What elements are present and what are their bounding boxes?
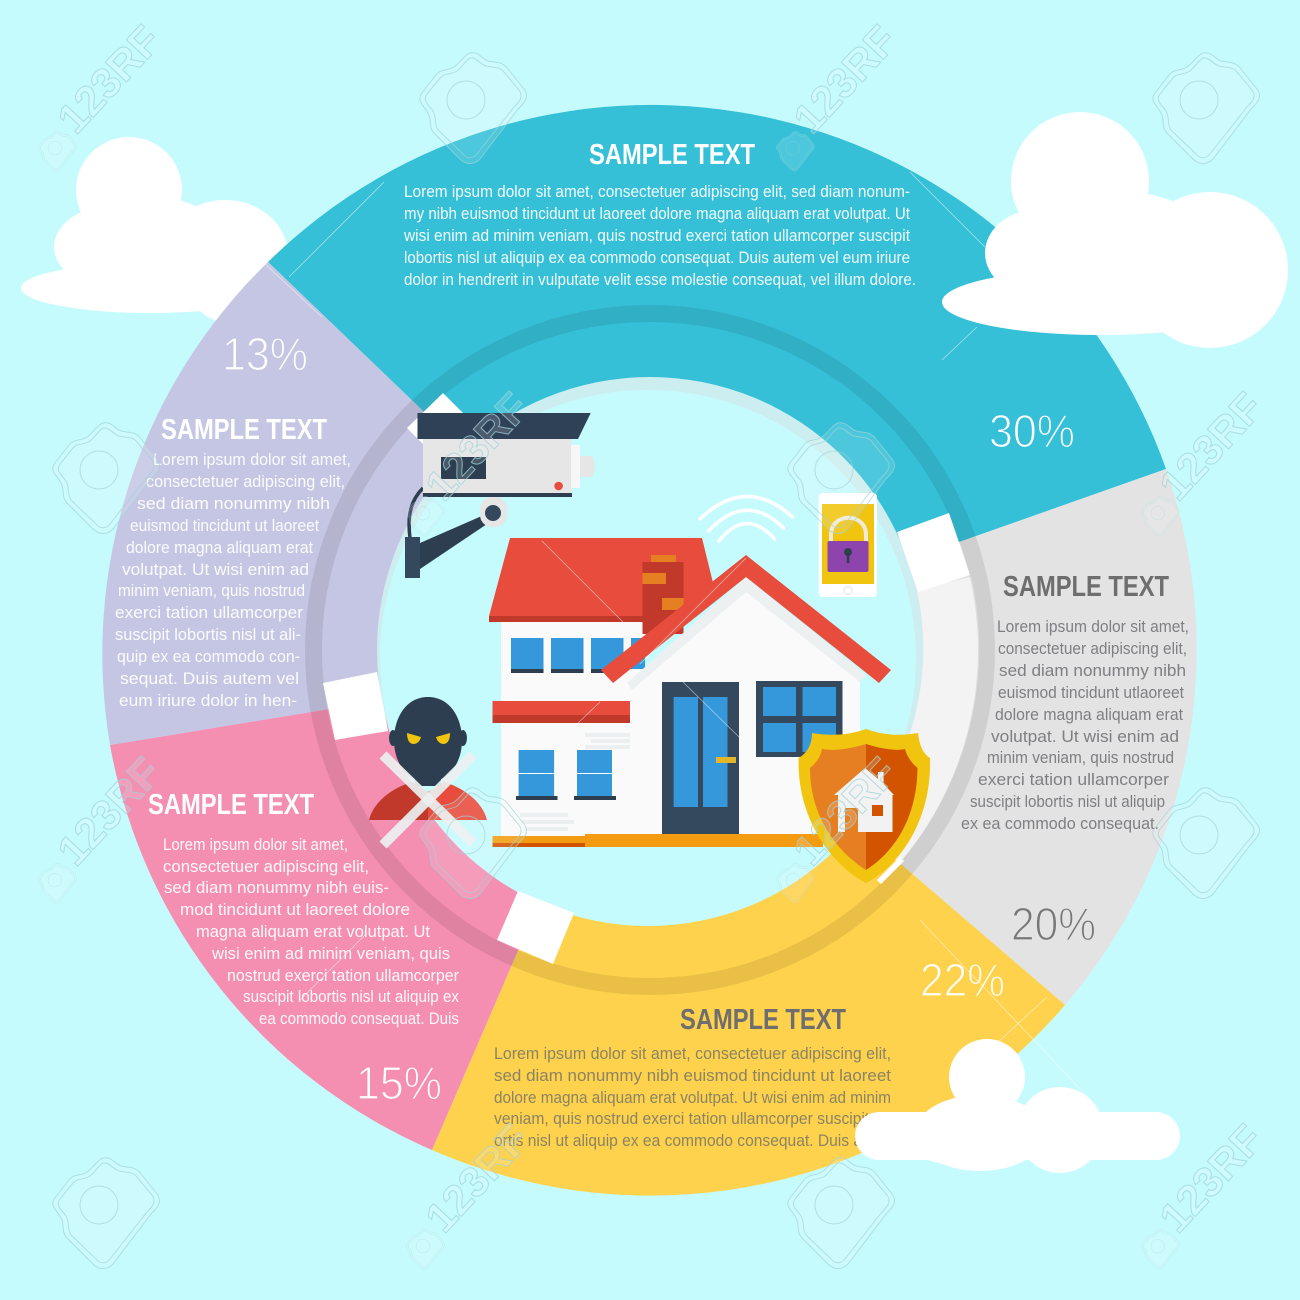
translucent ring <box>314 314 986 986</box>
body text: dolor in hendrerit in vulputate velit esse molestie consequat, vel illum dolore. <box>404 270 916 289</box>
icon: shield <box>799 729 930 883</box>
body text <box>115 450 351 710</box>
centre hole <box>377 377 923 923</box>
gray segment inner light band <box>878 583 951 845</box>
watermark text: 123RF <box>1150 383 1272 509</box>
old house roof <box>489 538 716 622</box>
upper windows <box>511 638 645 673</box>
body text <box>163 835 459 1028</box>
percent: 22% <box>920 954 1005 1006</box>
segment: pink 15% <box>110 650 650 1150</box>
notch: lavender teal <box>407 393 463 448</box>
watermark text: 123RF <box>48 16 170 142</box>
new house wall <box>630 585 860 836</box>
body text: suscipit lobortis nisl ut ali- <box>115 625 301 644</box>
notch: yellow pink <box>497 891 574 964</box>
watermark text: 123RF <box>416 383 538 509</box>
body text: euismod tincidunt ut laoreet <box>130 516 319 535</box>
icon: phone with padlock <box>819 493 877 597</box>
segment: yellow 22% <box>432 650 1065 1196</box>
body text: euismod tincidunt utlaoreet <box>998 683 1184 702</box>
body text: volutpat. Ut wisi enim ad <box>122 560 309 579</box>
lower windows <box>516 750 616 800</box>
text panel: teal <box>403 139 1075 457</box>
body text: quip ex ea commodo con- <box>117 647 300 666</box>
centre hole inner <box>380 390 916 926</box>
body text: dolore magna aliquam erat <box>126 538 313 557</box>
heading: SAMPLE TEXT <box>1003 571 1169 603</box>
body text <box>494 1044 891 1150</box>
percent: 20% <box>1011 898 1096 950</box>
body text: minim veniam, quis nostrud <box>987 748 1174 767</box>
awning <box>492 701 630 723</box>
cloud: top left <box>21 137 290 325</box>
segment: gray 20% <box>650 469 1197 1005</box>
body text: sequat. Duis autem vel <box>120 669 299 688</box>
body text <box>961 617 1189 833</box>
body text: sed diam nonummy nibh <box>137 494 330 513</box>
body text: sed diam nonummy nibh euismod tincidunt ut laoreet <box>494 1066 891 1085</box>
chimney <box>642 555 684 634</box>
heading: SAMPLE TEXT <box>148 789 314 821</box>
old house wall <box>501 622 645 837</box>
notch: gray yellow <box>877 857 904 884</box>
body text: sed diam nonummy nibh <box>999 661 1186 680</box>
text panel: lavender <box>115 328 351 710</box>
body text: consectetuer adipiscing elit, <box>998 639 1187 658</box>
foundation old house <box>492 836 585 847</box>
body text: my nibh euismod tincidunt ut laoreet dolore magna aliquam erat volutpat. Ut <box>404 204 910 223</box>
text panel: yellow <box>494 954 1005 1150</box>
segment: lavender 13% <box>102 262 650 745</box>
body text: eum iriure dolor in hen- <box>119 691 297 710</box>
door <box>662 682 739 834</box>
watermark text: 123RF <box>784 748 906 874</box>
body text: Lorem ipsum dolor sit amet, <box>153 450 351 469</box>
body text: ex ea commodo consequat. <box>961 814 1159 833</box>
watermark text: 123RF <box>416 1115 538 1241</box>
under roof shadow <box>627 577 866 690</box>
body text: ortis nisl ut aliquip ex ea commodo consequat. Duis a <box>494 1131 862 1150</box>
body text: wisi enim ad minim veniam, quis <box>211 944 450 963</box>
body text: suscipit lobortis nisl ut aliquip ex <box>243 987 459 1006</box>
body text: Lorem ipsum dolor sit amet, <box>163 835 348 854</box>
notch: teal gray <box>897 513 970 592</box>
percent: 13% <box>222 328 308 380</box>
watermark text: 123RF <box>48 748 170 874</box>
body text: veniam, quis nostrud exerci tation ullamcorper suscipit lo- <box>494 1109 891 1128</box>
body text: magna aliquam erat volutpat. Ut <box>196 922 430 941</box>
text panel: pink <box>148 789 459 1109</box>
body text: suscipit lobortis nisl ut aliquip <box>970 792 1165 811</box>
body text: ea commodo consequat. Duis <box>259 1009 459 1028</box>
body text: volutpat. Ut wisi enim ad <box>991 727 1179 746</box>
body text: mod tincidunt ut laoreet dolore <box>180 900 410 919</box>
body text: lobortis nisl ut aliquip ex ea commodo consequat. Duis autem vel eum iriure <box>404 248 910 267</box>
hairline watermark diagonals <box>264 172 1100 1110</box>
body text: exerci tation ullamcorper <box>115 603 303 622</box>
body text: Lorem ipsum dolor sit amet, consectetuer adipiscing elit, sed diam nonum- <box>404 182 910 201</box>
icon: burglar crossed out <box>369 697 487 845</box>
heading: SAMPLE TEXT <box>680 1004 846 1036</box>
body text: dolore magna aliquam erat <box>995 705 1183 724</box>
percent: 15% <box>356 1057 442 1109</box>
cloud: top right <box>942 112 1288 348</box>
house illustration <box>489 538 891 847</box>
body text: nostrud exerci tation ullamcorper <box>227 966 459 985</box>
notch: pink lavender <box>323 672 388 740</box>
cloud: bottom <box>855 1039 1180 1173</box>
percent: 30% <box>989 405 1075 457</box>
heading: SAMPLE TEXT <box>589 139 755 171</box>
watermark text: 123RF <box>784 16 906 142</box>
foundation new house <box>585 834 823 847</box>
heading: SAMPLE TEXT <box>161 414 327 446</box>
old house roof eave <box>489 616 645 622</box>
body text: consectetuer adipiscing elit, <box>146 472 345 491</box>
body text: exerci tation ullamcorper <box>978 770 1169 789</box>
body text: consectetuer adipiscing elit, <box>163 857 369 876</box>
icon: wifi <box>700 496 792 541</box>
body text: sed diam nonummy nibh euis- <box>164 878 389 897</box>
watermark text: 123RF <box>1150 1115 1272 1241</box>
body text: dolore magna aliquam erat volutpat. Ut wisi enim ad minim <box>494 1088 891 1107</box>
body text: wisi enim ad minim veniam, quis nostrud exerci tation ullamcorper suscipit <box>403 226 910 245</box>
body text: Lorem ipsum dolor sit amet, consectetuer adipiscing elit, <box>494 1044 891 1063</box>
body text: Lorem ipsum dolor sit amet, <box>997 617 1189 636</box>
donut chart: five segments <box>102 105 1197 1196</box>
body text <box>403 182 916 289</box>
window <box>756 681 842 757</box>
text panel: gray <box>961 571 1189 950</box>
body text: minim veniam, quis nostrud <box>118 581 305 600</box>
segment: teal 30% <box>268 105 1166 650</box>
new house roof <box>601 555 891 683</box>
wall bricks <box>520 733 631 831</box>
icon: security camera <box>405 413 595 578</box>
